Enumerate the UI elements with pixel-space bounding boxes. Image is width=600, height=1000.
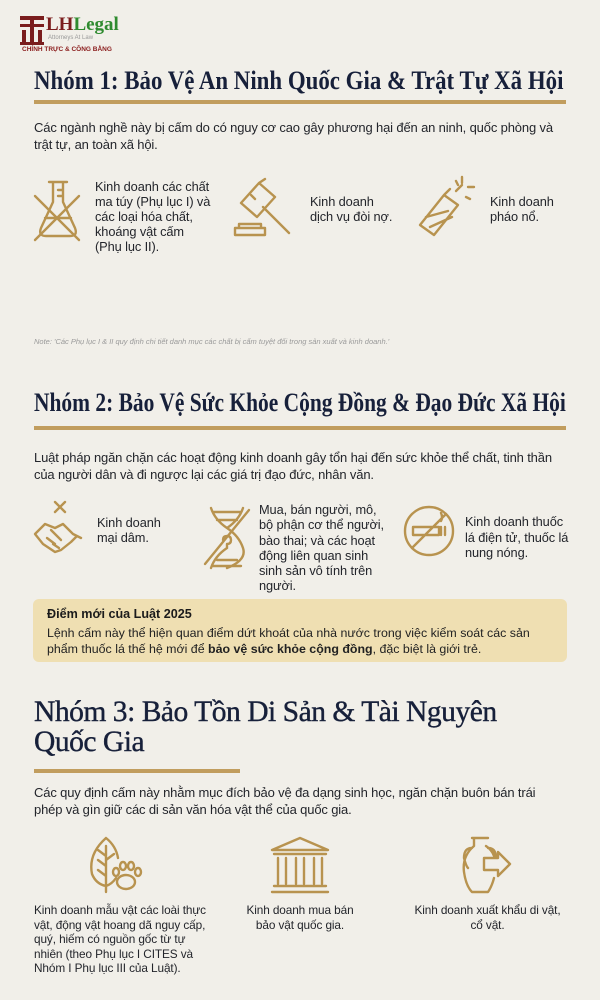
callout: new in law 2025: Lệnh cấm này thể hiện quan điểm dứt khoát của nhà nước trong việc kiểm soát các sản phẩm thuốc lá thế hệ mới để bảo vệ sức khỏe cộng đồng, đặc biệt là giới trẻ. [47, 626, 530, 656]
text: lá điện tử, thuốc lá [465, 530, 568, 544]
callout: new in law 2025: Điểm mới của Luật 2025 [47, 607, 192, 621]
text: mại dâm. [97, 530, 149, 545]
text: group 3 intro: phép và gìn giữ các di sản văn hóa vật thể của quốc gia. [34, 802, 352, 817]
text: Kinh doanh mẫu vật các loài thực [34, 903, 206, 917]
text: ma túy (Phụ lục I) và [95, 194, 210, 209]
item: human trafficking [204, 502, 384, 593]
text [34, 903, 206, 975]
title: group 1: Nhóm 1: Bảo Vệ An Ninh Quốc Gia & Trật Tự Xã Hội [34, 66, 563, 95]
text: nhiên (theo Phụ lục I CITES và [34, 947, 193, 961]
item: e-cigarettes [404, 506, 568, 560]
icon: no smoking [404, 506, 454, 556]
item: debt collection [234, 178, 392, 236]
text: nung nóng. [465, 545, 528, 560]
item: prostitution [34, 500, 161, 554]
text: Mua, bán người, mô, [259, 502, 376, 517]
text: group 1 intro: trật tự, an toàn xã hội. [34, 137, 158, 152]
text: pháo nổ. [490, 209, 539, 224]
icon: leaf and paw [90, 836, 142, 894]
text: các loại hóa chất, [95, 209, 193, 224]
title: group 2: Nhóm 2: Bảo Vệ Sức Khỏe Cộng Đồng & Đạo Đức Xã Hội [34, 388, 566, 417]
text [310, 194, 392, 224]
title: group 3 [34, 695, 497, 758]
text: bộ phận cơ thể người, [259, 517, 384, 532]
text: group 2 intro [34, 450, 552, 482]
logo: Attorneys At Law [48, 35, 93, 41]
text: người. [259, 578, 296, 593]
text [95, 179, 210, 254]
text: sinh sản vô tính trên [259, 563, 372, 578]
text [259, 502, 384, 593]
logo [20, 14, 119, 53]
item: national treasures [246, 836, 354, 932]
text: group 1 intro [34, 120, 554, 152]
icon: gavel [234, 178, 290, 236]
icon: temple [270, 836, 330, 894]
text [490, 194, 554, 224]
text: vật, động vật hoang dã nguy cấp, [34, 918, 205, 932]
text: Kinh doanh thuốc [465, 514, 563, 529]
text: khoáng vật cấm [95, 224, 184, 239]
text: cổ vật. [470, 918, 505, 932]
icon: handshake with x [34, 500, 82, 554]
text: group 1 intro: Các ngành nghề này bị cấm do có nguy cơ cao gây phương hại đến an ninh, quốc phòng và [34, 120, 553, 135]
text: group 3 intro [34, 785, 535, 817]
text: Kinh doanh [490, 194, 554, 209]
title: group 3: Nhóm 3: Bảo Tồn Di Sản & Tài Nguyên [34, 695, 497, 728]
note: Note: 'Các Phụ lục I & II quy định chi tiết danh mục các chất bị cấm tuyệt đối trong sản xuất và kinh doanh.' [34, 337, 389, 346]
item: fireworks [418, 176, 554, 236]
icon: logo mark [20, 16, 44, 45]
text: Kinh doanh [310, 194, 374, 209]
text: (Phụ lục II). [95, 239, 159, 254]
callout: new in law 2025 [33, 599, 567, 662]
text: group 3 intro: Các quy định cấm này nhằm mục đích bảo vệ đa dạng sinh học, ngăn chặn buôn bán trái [34, 785, 535, 800]
text [414, 903, 561, 932]
text: Kinh doanh các chất [95, 179, 209, 194]
icon: flask crossed [34, 180, 80, 242]
item: artifacts export [414, 836, 561, 932]
text: dịch vụ đòi nợ. [310, 209, 392, 224]
text: Kinh doanh [97, 515, 161, 530]
item: drugs [34, 179, 210, 254]
text: bảo vật quốc gia. [256, 918, 344, 932]
text: bào thai; và các hoạt [259, 533, 375, 548]
text: quý, hiếm có nguồn gốc từ tự [34, 932, 185, 946]
icon: vase with arrow [462, 836, 512, 894]
title: group 3: Quốc Gia [34, 725, 144, 758]
logo text: LHLegal [46, 14, 119, 35]
logo: CHÍNH TRỰC & CÔNG BẰNG [22, 46, 112, 53]
text [465, 514, 568, 560]
text: Kinh doanh xuất khẩu di vật, [414, 903, 561, 917]
text [246, 903, 354, 932]
text: Kinh doanh mua bán [246, 903, 354, 917]
text [97, 515, 161, 545]
icon: dna crossed [204, 506, 250, 570]
text: Nhóm I Phụ lục III của Luật). [34, 961, 181, 975]
text: group 2 intro: Luật pháp ngăn chặn các hoạt động kinh doanh gây tổn hại đến sức khỏe thể chất, tinh thần [34, 450, 552, 465]
text: group 2 intro: của người dân và đi ngược lại các giá trị đạo đức, nhân văn. [34, 467, 374, 482]
icon: firecracker [418, 176, 476, 236]
item: wildlife [34, 836, 206, 975]
text: động liên quan sinh [259, 548, 368, 563]
